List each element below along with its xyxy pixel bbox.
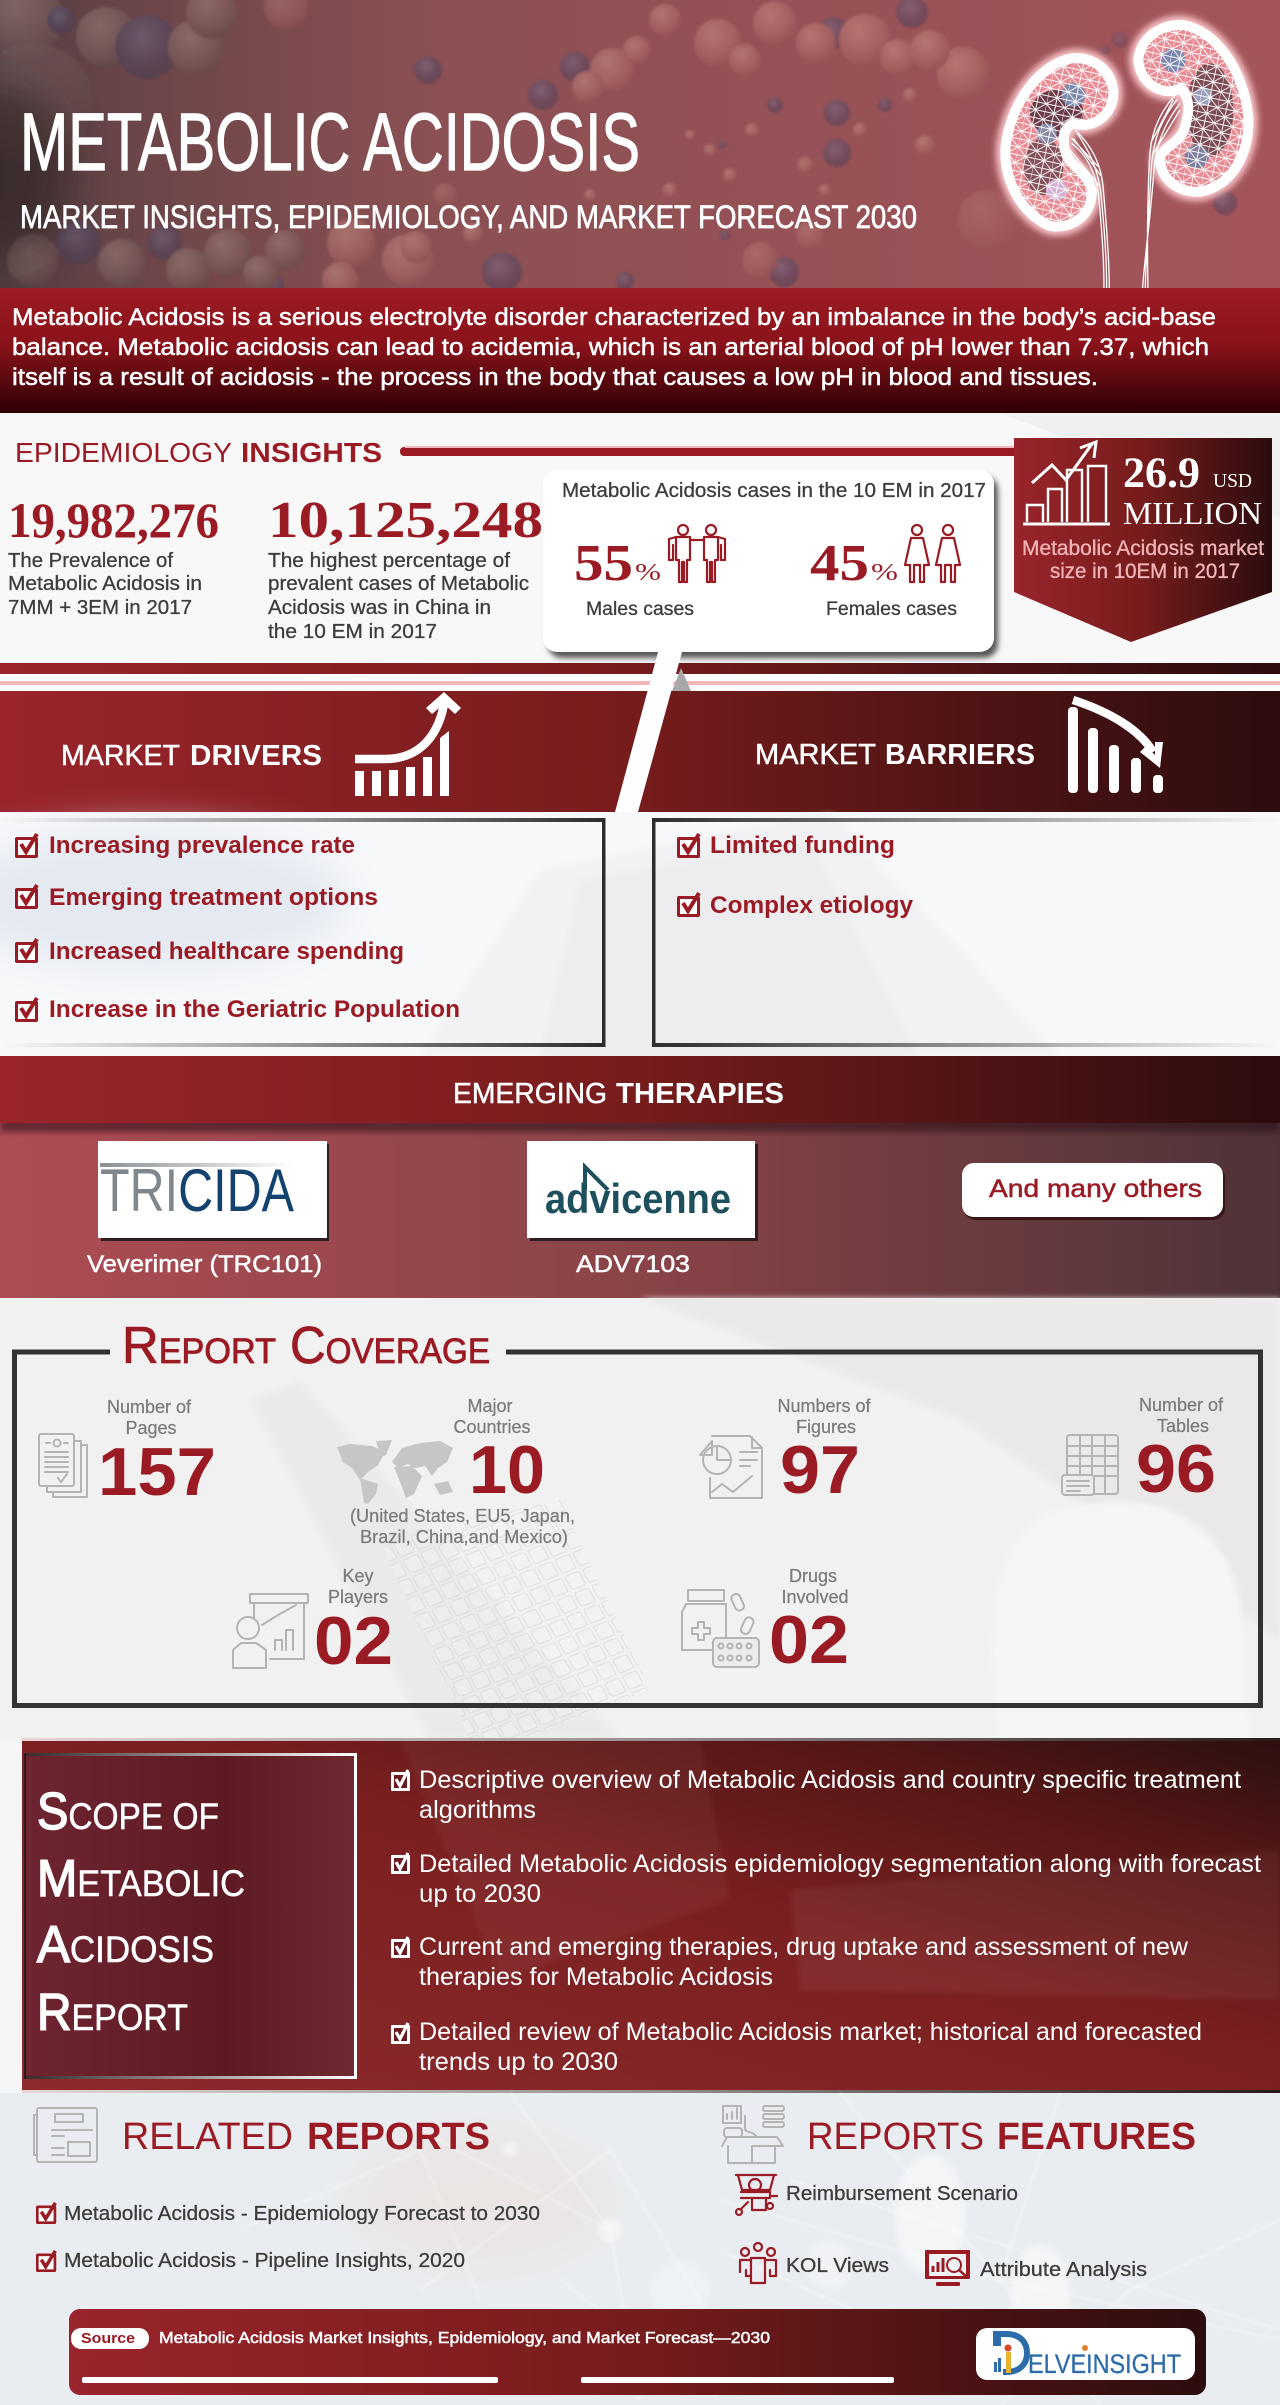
heading: emerging therapies: EMERGING — [453, 1078, 607, 1110]
heading: epidemiology insights: INSIGHTS — [241, 437, 382, 468]
icon: bar chart with rising arrow — [1023, 442, 1110, 524]
heading: emerging therapies: THERAPIES — [616, 1078, 784, 1110]
stat: number of figures: 97 — [780, 1432, 860, 1508]
intro text band: Metabolic Acidosis is a serious electrolyte disorder characterized by an imbalance in the body’s acid-base — [12, 304, 1216, 331]
stat: number of pages: 157 — [98, 1434, 216, 1510]
heading: market drivers: DRIVERS — [190, 740, 322, 772]
header banner — [0, 0, 1280, 298]
panel: emerging therapies — [0, 1056, 1280, 1298]
stat: major countries: Brazil, China,and Mexico) — [360, 1527, 568, 1547]
stat: number of pages: Pages — [125, 1418, 177, 1438]
box: scope title: ACIDOSIS — [37, 1916, 214, 1974]
box: market drivers: Increased healthcare spending — [49, 938, 404, 965]
panel: scope of report — [22, 1738, 1280, 2093]
stat: major countries: Major — [467, 1396, 513, 1416]
stat: number of tables: Tables — [1157, 1416, 1209, 1436]
panel: market drivers and barriers lists — [0, 812, 1280, 1056]
heading: reports features: REPORTS — [807, 2116, 984, 2158]
icon: rising arrow over bars — [355, 692, 461, 796]
stat: key players: Key — [342, 1566, 374, 1586]
label: ADV7103: ADV7103 — [576, 1251, 690, 1278]
list: scope items: trends up to 2030 — [419, 2048, 618, 2076]
icon: medicine bottle and pills — [682, 1590, 759, 1667]
feature: reimbursement scenario: Reimbursement Scenario — [786, 2183, 1018, 2205]
box: market barriers: Complex etiology — [710, 892, 914, 919]
stat: prevalence: The Prevalence of — [8, 550, 173, 572]
icon: table — [1062, 1435, 1118, 1495]
box: market drivers — [0, 818, 606, 1047]
heading: market barriers — [755, 739, 1035, 771]
list: scope items: Detailed review of Metabolic Acidosis market; historical and forecasted — [419, 2018, 1202, 2046]
banner: market drivers and barriers — [0, 652, 1280, 812]
icon: report with pie chart — [700, 1436, 762, 1498]
stat: key players: 02 — [314, 1603, 393, 1679]
stat: number of tables: 96 — [1136, 1431, 1216, 1507]
subtitle: MARKET INSIGHTS, EPIDEMIOLOGY, AND MARKET FORECAST 2030 — [20, 199, 917, 235]
footer: source — [69, 2309, 1206, 2395]
stat: key players: Players — [328, 1587, 388, 1607]
callout: market size: size in 10EM in 2017 — [1050, 560, 1240, 583]
stat: drugs involved: Involved — [781, 1587, 849, 1607]
intro text band: itself is a result of acidosis - the process in the body that causes a low pH in blood and tissues. — [12, 364, 1098, 391]
logo: DelveInsight: ELVEINSIGHT — [1028, 2349, 1181, 2379]
list: scope items: algorithms — [419, 1796, 536, 1824]
heading: related reports: REPORTS — [307, 2116, 490, 2158]
icon: falling arrow over bars — [1068, 700, 1163, 793]
stat: highest percentage in China: The highest percentage of — [268, 550, 510, 572]
box: market drivers: Emerging treatment options — [49, 884, 378, 911]
list: scope items — [391, 1766, 1261, 2076]
icon: two men — [669, 525, 725, 582]
heading: emerging therapies — [453, 1078, 784, 1110]
icon: document stack — [39, 1434, 87, 1497]
heading: market drivers — [61, 740, 322, 772]
stat: highest percentage in China: Acidosis was in China in — [268, 597, 491, 619]
card: male and female cases: % — [871, 560, 898, 586]
icon: world map — [337, 1440, 453, 1504]
stat: number of figures: Numbers of — [777, 1396, 872, 1416]
stat: prevalence: Metabolic Acidosis in — [8, 573, 202, 595]
source pill — [71, 2328, 149, 2349]
feature: attribute analysis: Attribute Analysis — [980, 2259, 1147, 2281]
frame and heading: report coverage: COVERAGE — [290, 1317, 490, 1375]
stat: number of figures — [700, 1396, 872, 1508]
card: male and female cases: % — [635, 560, 661, 586]
source text: Metabolic Acidosis Market Insights, Epidemiology, and Market Forecast—2030 — [159, 2330, 770, 2347]
stat: number of tables — [1062, 1395, 1224, 1507]
logo: DelveInsight — [976, 2328, 1195, 2380]
icon: presenter — [233, 1594, 308, 1668]
box: market drivers: Increase in the Geriatric Population — [49, 996, 460, 1023]
card: male and female cases: 55 — [574, 535, 633, 592]
heading: reports features: FEATURES — [997, 2116, 1196, 2158]
icon: three people — [740, 2243, 776, 2283]
card: male and female cases: Metabolic Acidosis cases in the 10 EM in 2017 — [562, 480, 986, 502]
heading: reports features — [722, 2106, 1196, 2163]
feature: attribute analysis — [925, 2250, 1147, 2286]
box: scope title: SCOPE OF — [37, 1783, 219, 1841]
box: market barriers — [652, 818, 1280, 1047]
stat: number of tables: Number of — [1139, 1395, 1224, 1415]
panel: related reports and report features — [0, 2093, 1280, 2405]
icon: two women — [905, 525, 960, 582]
stat: highest percentage in China: prevalent cases of Metabolic — [268, 573, 529, 595]
box: scope title: METABOLIC — [37, 1850, 245, 1908]
stat: major countries: (United States, EU5, Japan, — [350, 1506, 575, 1526]
list: related reports: Metabolic Acidosis - Pipeline Insights, 2020 — [64, 2250, 465, 2272]
callout: and many others: And many others — [989, 1175, 1202, 1203]
stat: number of pages — [39, 1397, 216, 1510]
frame and heading: report coverage — [14, 1317, 1260, 1706]
icon: glowing kidneys — [990, 17, 1263, 288]
title: METABOLIC ACIDOSIS — [20, 97, 640, 188]
list: scope items: up to 2030 — [419, 1880, 541, 1908]
callout: market size: MILLION — [1123, 495, 1262, 531]
stat: highest percentage in China: 10,125,248 — [268, 492, 543, 549]
callout: market size — [1014, 438, 1272, 642]
stat: highest percentage in China — [268, 492, 543, 643]
feature: KOL views: KOL Views — [786, 2255, 889, 2277]
heading: related reports: RELATED — [122, 2116, 293, 2158]
box: scope title: REPORT — [37, 1984, 188, 2042]
logo: Tricida: TRICIDA — [100, 1157, 294, 1224]
stat: number of pages: Number of — [107, 1397, 192, 1417]
feature: reimbursement scenario — [736, 2175, 1018, 2215]
heading: epidemiology insights: EPIDEMIOLOGY — [15, 437, 232, 468]
panel: report coverage — [0, 1298, 1280, 1740]
stat: drugs involved — [682, 1566, 849, 1678]
logo: Advicenne: advicenne — [545, 1175, 731, 1222]
source pill: Source — [81, 2330, 135, 2347]
list: scope items: Descriptive overview of Metabolic Acidosis and country specific treatment — [419, 1766, 1241, 1794]
stat: prevalence — [8, 492, 219, 619]
feature: KOL views — [740, 2243, 889, 2283]
stat: major countries — [337, 1396, 575, 1547]
logo: Tricida — [98, 1141, 329, 1241]
stat: prevalence: 7MM + 3EM in 2017 — [8, 597, 192, 619]
callout: market size: USD — [1213, 470, 1252, 492]
frame and heading: report coverage: REPORT — [122, 1317, 276, 1375]
card: male and female cases: Males cases — [586, 599, 694, 620]
card: male and female cases: 45 — [810, 535, 869, 592]
logo: Advicenne — [527, 1141, 758, 1241]
icon: report pages — [34, 2108, 97, 2162]
icon: box with data — [722, 2106, 784, 2163]
stat: drugs involved: Drugs — [789, 1566, 837, 1586]
heading: market barriers: BARRIERS — [885, 739, 1035, 771]
intro text band: balance. Metabolic acidosis can lead to acidemia, which is an arterial blood of pH lower than 7.37, which — [12, 334, 1209, 361]
box: market drivers: Increasing prevalence rate — [49, 832, 355, 859]
list: related reports: Metabolic Acidosis - Epidemiology Forecast to 2030 — [64, 2203, 540, 2225]
intro text band — [0, 288, 1280, 413]
icon: money in hand — [736, 2175, 777, 2215]
list: scope items: Detailed Metabolic Acidosis epidemiology segmentation along with forecast — [419, 1850, 1261, 1878]
stat: key players — [233, 1566, 393, 1679]
box: market barriers: Limited funding — [710, 832, 895, 859]
stat: highest percentage in China: the 10 EM in 2017 — [268, 621, 437, 643]
stat: major countries: Countries — [453, 1417, 531, 1437]
heading: market barriers: MARKET — [755, 739, 876, 771]
stat: number of figures: Figures — [796, 1417, 856, 1437]
heading: related reports — [34, 2108, 490, 2162]
callout: market size: 26.9 — [1123, 450, 1200, 497]
list: related reports — [36, 2203, 540, 2272]
list: scope items: Current and emerging therapies, drug uptake and assessment of new — [419, 1933, 1189, 1961]
callout: market size: Metabolic Acidosis market — [1022, 537, 1264, 560]
callout: and many others — [962, 1163, 1225, 1220]
icon: monitor with magnifier — [925, 2250, 970, 2286]
heading: epidemiology insights — [15, 437, 382, 468]
panel: epidemiology insights — [0, 413, 1280, 663]
list: scope items: therapies for Metabolic Acidosis — [419, 1963, 773, 1991]
card: male and female cases: Females cases — [826, 599, 957, 620]
background: DNA spheres — [0, 0, 1237, 298]
stat: drugs involved: 02 — [769, 1602, 849, 1678]
stat: prevalence: 19,982,276 — [8, 492, 219, 548]
box: scope title — [24, 1753, 357, 2079]
label: Veverimer: Veverimer (TRC101) — [87, 1251, 322, 1278]
stat: major countries: 10 — [469, 1432, 545, 1508]
heading: market drivers: MARKET — [61, 740, 180, 772]
card: male and female cases — [543, 470, 998, 658]
